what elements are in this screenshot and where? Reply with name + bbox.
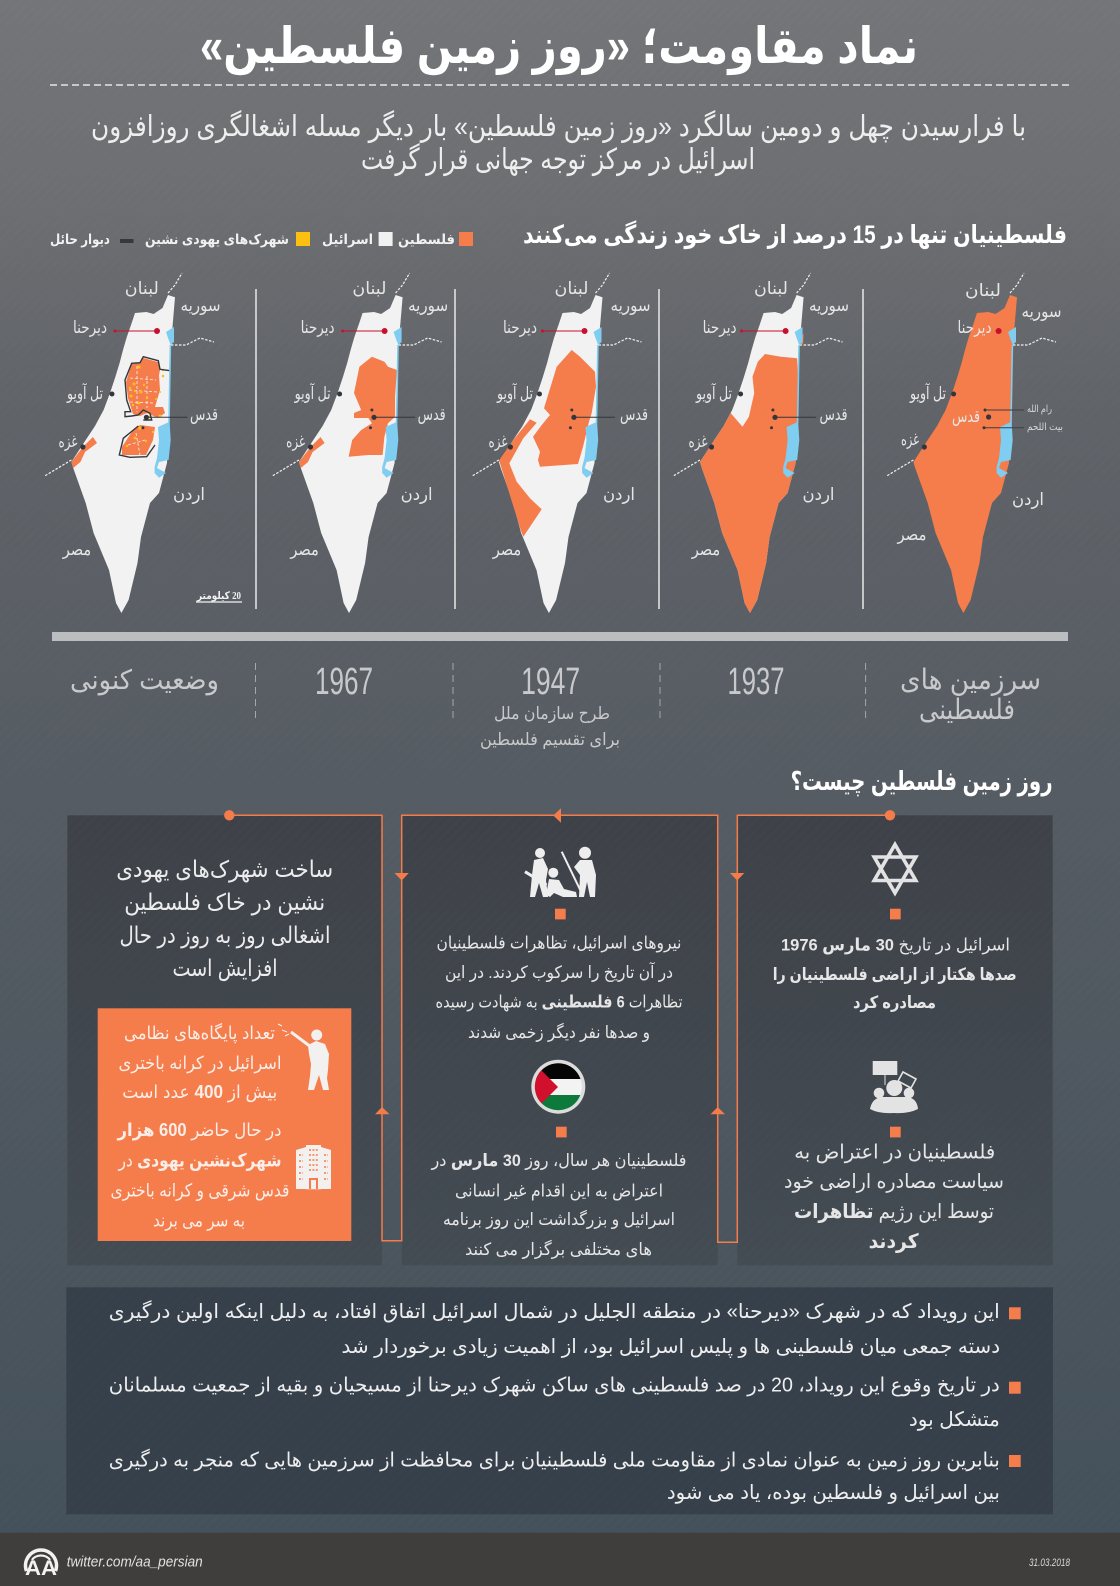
text: annual commemoration: فلسطینیان هر سال، روز 30 مارس در bbox=[431, 1151, 686, 1170]
map: 1947: تل آویو bbox=[496, 382, 533, 403]
note 3 bbox=[109, 1449, 1000, 1504]
map: 1947: سوریه bbox=[610, 296, 650, 315]
map: current situation: اردن bbox=[173, 485, 205, 504]
panel: bottom notes bbox=[66, 1287, 1053, 1514]
map: 1967: مصر bbox=[289, 540, 319, 559]
note 2: در تاریخ وقوع این رویداد، 20 در صد فلسطینی های ساکن شهرک دیرحنا از مسیحیان و بقیه از جمعیت مسلمانان bbox=[109, 1375, 1000, 1397]
map: 1967: قدس bbox=[418, 405, 446, 424]
icon: building bbox=[296, 1145, 331, 1189]
map: Palestinian lands: غزه bbox=[901, 430, 919, 449]
text: suppression: نیروهای اسرائیل، تظاهرات فلسطینیان bbox=[436, 933, 682, 952]
map: 1947: لبنان bbox=[554, 279, 588, 298]
map: 1937: قدس bbox=[819, 405, 847, 424]
note 2 bbox=[109, 1375, 1000, 1431]
map: 1947: اردن bbox=[603, 485, 635, 504]
icon: protesters bbox=[870, 1061, 918, 1113]
panel: left bbox=[67, 815, 382, 1265]
timeline label: 1967: 1967 bbox=[315, 661, 373, 703]
subtitle: اسرائیل در مرکز توجه جهانی قرار گرفت bbox=[361, 143, 755, 176]
text: protests: کردند bbox=[869, 1231, 919, 1253]
text: protests: سیاست مصادره اراضی خود bbox=[784, 1171, 1004, 1193]
text: land confiscation: مصادره کرد bbox=[853, 993, 936, 1013]
legend: فلسطین bbox=[398, 231, 455, 248]
callout: orange box: به سر می برند bbox=[153, 1211, 245, 1232]
text: protests: فلسطینیان در اعتراض به bbox=[794, 1141, 995, 1163]
timeline label: 1937: 1937 bbox=[728, 661, 784, 703]
map: Palestinian lands: قدس bbox=[952, 407, 980, 426]
date: 31.03.2018 bbox=[1029, 1557, 1071, 1569]
map: 1937: تل آویو bbox=[695, 382, 732, 403]
timeline label: 1947: برای تقسیم فلسطین bbox=[480, 730, 620, 750]
callout: orange box: قدس شرقی و کرانه باختری bbox=[110, 1181, 290, 1202]
map: 1947: دیرحنا bbox=[503, 318, 537, 337]
legend bbox=[50, 231, 473, 248]
text: settlements: ساخت شهرک‌های یهودی bbox=[116, 856, 333, 883]
callout: orange box: تعداد پایگاه‌های نظامی bbox=[124, 1022, 275, 1044]
map: Palestinian lands: تل آویو bbox=[909, 382, 946, 403]
map: Palestinian lands: اردن bbox=[1012, 490, 1044, 509]
map: 1937: لبنان bbox=[754, 279, 788, 298]
timeline label: 1947 bbox=[480, 661, 620, 750]
note 3: بین اسرائیل و فلسطین بوده، یاد می شود bbox=[667, 1482, 1000, 1504]
map: Palestinian lands: مصر bbox=[897, 525, 926, 544]
legend: دیوار حائل bbox=[50, 231, 110, 248]
map: 1947: غزه bbox=[488, 432, 508, 451]
timeline label: Palestinian lands bbox=[900, 664, 1041, 725]
legend: شهرک‌های یهودی نشین bbox=[145, 231, 289, 248]
panel: right bbox=[737, 815, 1053, 1265]
title: نماد مقاومت؛ «روز زمین فلسطین» bbox=[200, 18, 918, 76]
panel: middle bbox=[402, 815, 718, 1265]
note 3: بنابرین روز زمین به عنوان نمادی از مقاومت ملی فلسطینیان برای محافظت از سرزمین هایی که منجر به درگیری bbox=[109, 1449, 1000, 1472]
map: 1937: اردن bbox=[802, 485, 834, 504]
source link: twitter.com/aa_persian bbox=[67, 1554, 203, 1570]
map: 1967: دیرحنا bbox=[301, 318, 335, 337]
note 1: این رویداد که در شهرک «دیرحنا» در منطقه الجلیل در شمال اسرائیل اتفاق افتاد، به دلیل اینکه اولین درگیری bbox=[109, 1300, 1000, 1323]
text: annual commemoration: اعتراض به این اقدام غیر انسانی bbox=[455, 1182, 663, 1201]
callout: orange box: اسرائیل در کرانه باختری bbox=[118, 1053, 282, 1074]
text: land confiscation: اسرائیل در تاریخ 30 مارس 1976 bbox=[781, 936, 1010, 956]
map: 1937: سوریه bbox=[809, 296, 849, 315]
map: current situation: سوریه bbox=[180, 296, 220, 315]
text: settlements bbox=[116, 856, 333, 982]
timeline label: 1947: 1947 bbox=[521, 661, 580, 703]
icon: soldiers beating protester bbox=[525, 847, 596, 897]
map: current situation: قدس bbox=[190, 405, 218, 424]
map: current situation bbox=[45, 273, 242, 613]
map: 1967: اردن bbox=[401, 485, 433, 504]
map: current situation: دیرحنا bbox=[73, 318, 107, 337]
map: Palestinian lands: بیت اللحم bbox=[1027, 422, 1063, 433]
callout: orange box bbox=[98, 1008, 351, 1241]
text: suppression: در آن تاریخ را سرکوب کردند. در این bbox=[445, 961, 673, 983]
callout: orange box: شهرک‌نشین یهودی در bbox=[118, 1151, 282, 1172]
map: Palestinian lands: دیرحنا bbox=[958, 318, 992, 337]
text: suppression: و صدها نفر دیگر زخمی شدند bbox=[468, 1022, 650, 1042]
map: 1967: غزه bbox=[286, 432, 305, 451]
map: 1937: غزه bbox=[688, 432, 708, 451]
footer bbox=[0, 1533, 1120, 1586]
map: 1947: مصر bbox=[492, 540, 521, 559]
map: 1947: قدس bbox=[620, 405, 648, 424]
map: current situation: تل آویو bbox=[66, 382, 103, 403]
note 2: متشکل بود bbox=[909, 1409, 1000, 1431]
map: 1937: دیرحنا bbox=[703, 318, 737, 337]
note 1 bbox=[109, 1300, 1000, 1359]
legend: اسرائیل bbox=[322, 231, 373, 248]
text: land confiscation bbox=[773, 936, 1017, 1013]
map: 1967: لبنان bbox=[352, 279, 386, 298]
text: land confiscation: صدها هکتار از اراضی فلسطینیان را bbox=[773, 965, 1017, 984]
callout: orange box: در حال حاضر 600 هزار bbox=[117, 1120, 281, 1141]
note 1: دسته جمعی میان فلسطینی ها و پلیس اسرائیل بود، از اهمیت زیادی برخوردار شد bbox=[342, 1336, 1000, 1359]
map: Palestinian lands: لبنان bbox=[965, 281, 1001, 300]
map: Palestinian lands: رام الله bbox=[1027, 404, 1052, 415]
timeline bar bbox=[52, 632, 1068, 641]
map: 1937 bbox=[673, 273, 849, 613]
icon: star of David bbox=[874, 844, 916, 893]
timeline label: Palestinian lands: فلسطینی bbox=[919, 694, 1015, 725]
text: protests: توسط این رژیم تظاهرات bbox=[794, 1201, 994, 1223]
text: suppression bbox=[436, 933, 683, 1042]
map: Palestinian lands bbox=[887, 273, 1063, 613]
map: Palestinian lands: سوریه bbox=[1022, 302, 1062, 321]
map: 1937: مصر bbox=[691, 540, 720, 559]
map: current situation: غزه bbox=[58, 432, 78, 451]
icon: Palestinian flag bbox=[531, 1060, 585, 1114]
text: settlements: اشغالی روز به روز در حال bbox=[120, 922, 330, 949]
text: annual commemoration: اسرائیل و بزرگداشت این روز برنامه bbox=[443, 1209, 675, 1229]
map: 1967: تل آویو bbox=[294, 382, 331, 403]
text: settlements: نشین در خاک فلسطین bbox=[124, 889, 325, 916]
timeline label: current: وضعیت کنونی bbox=[70, 665, 219, 696]
map: current situation: لبنان bbox=[125, 279, 159, 298]
map section heading: فلسطینیان تنها در 15 درصد از خاک خود زندگی می‌کنند bbox=[523, 220, 1067, 250]
text: annual commemoration bbox=[431, 1151, 686, 1259]
text: suppression: تظاهرات 6 فلسطینی به شهادت رسیده bbox=[436, 993, 683, 1013]
callout: orange box: بیش از 400 عدد است bbox=[122, 1082, 277, 1102]
timeline label: 1947: طرح سازمان ملل bbox=[494, 704, 610, 724]
map: 1947 bbox=[472, 273, 650, 613]
logo: AA: AA bbox=[25, 1557, 57, 1580]
map: current situation: 20 کیلومتر bbox=[196, 591, 241, 602]
map: 1967: سوریه bbox=[408, 296, 448, 315]
map: 1967 bbox=[272, 273, 448, 613]
subtitle bbox=[91, 110, 1026, 176]
text: annual commemoration: های مختلفی برگزار می کنند bbox=[465, 1239, 652, 1259]
flow connector arrows bbox=[224, 808, 895, 1242]
map: current situation: مصر bbox=[62, 540, 91, 559]
text: protests bbox=[784, 1141, 1004, 1253]
icon: soldier bbox=[278, 1024, 329, 1090]
timeline label: Palestinian lands: سرزمین های bbox=[900, 664, 1041, 696]
text: settlements: افزایش است bbox=[172, 955, 278, 982]
